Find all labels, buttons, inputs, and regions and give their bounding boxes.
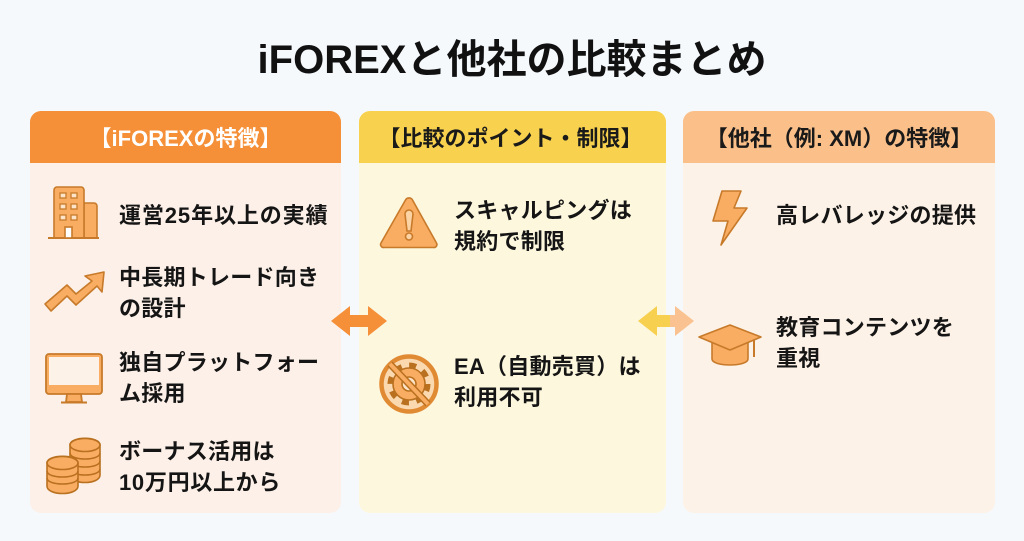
text: mid to long term design: 中長期トレード向き xyxy=(119,265,319,290)
text: mid to long term design xyxy=(119,265,319,321)
text: bonus condition: 10万円以上から xyxy=(119,470,281,495)
text: proprietary platform: ム採用 xyxy=(119,381,186,406)
text: education content xyxy=(776,315,954,371)
text: education content: 教育コンテンツを xyxy=(776,315,954,340)
panel: other brokers features xyxy=(683,111,995,513)
heading: iFOREX features: 【iFOREXの特徴】 xyxy=(90,126,281,151)
text: track record: 運営25年以上の実績 xyxy=(119,203,328,228)
title: iFOREXと他社の比較まとめ xyxy=(258,38,766,82)
text: scalping restriction: スキャルピングは xyxy=(454,198,632,223)
text: mid to long term design: の設計 xyxy=(119,296,186,321)
heading: other brokers features: 【他社（例: XM）の特徴】 xyxy=(706,126,972,151)
text: scalping restriction: 規約で制限 xyxy=(454,229,565,254)
text: bonus condition xyxy=(119,439,281,495)
heading: comparison points: 【比較のポイント・制限】 xyxy=(378,126,642,151)
panel: comparison points and limits xyxy=(359,111,666,513)
text: EA not allowed: EA（自動売買）は xyxy=(454,354,641,379)
text: proprietary platform xyxy=(119,350,319,406)
heading: iFOREX features xyxy=(30,111,341,163)
text: scalping restriction xyxy=(454,198,632,254)
text: bonus condition: ボーナス活用は xyxy=(119,439,275,464)
text: EA not allowed xyxy=(454,354,641,410)
panel: iFOREX features xyxy=(30,111,341,513)
heading: comparison points xyxy=(359,111,666,163)
text: education content: 重視 xyxy=(776,346,821,371)
text: EA not allowed: 利用不可 xyxy=(454,385,543,410)
text: proprietary platform: 独自プラットフォー xyxy=(119,350,319,375)
heading: other brokers features xyxy=(683,111,995,163)
text: high leverage: 高レバレッジの提供 xyxy=(776,203,976,228)
